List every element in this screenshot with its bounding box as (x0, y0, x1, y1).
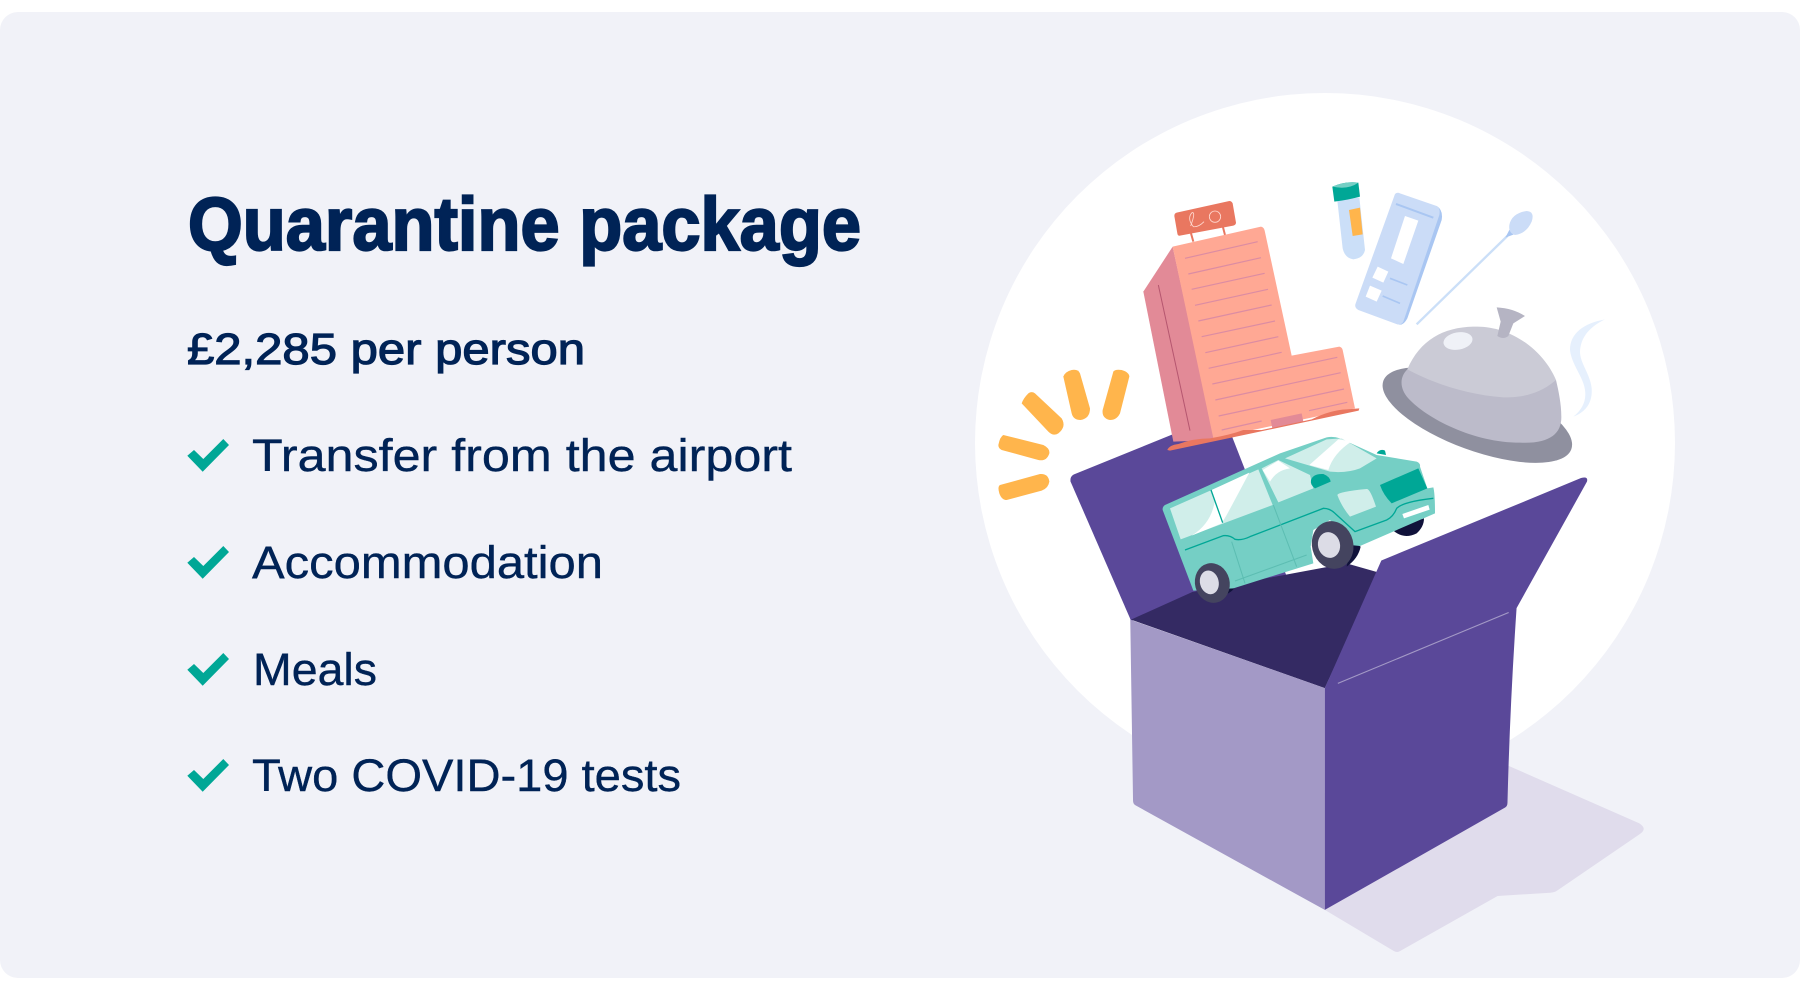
title: Quarantine package (188, 182, 861, 266)
list item: meals: Meals (253, 644, 377, 695)
box front faces (1130, 477, 1587, 910)
price: £2,285 per person (187, 325, 585, 374)
trim lines (1185, 498, 1433, 550)
icon: check (187, 439, 229, 472)
right face and flap (1325, 477, 1587, 910)
body (1163, 437, 1435, 591)
list item: accommodation: Accommodation (252, 537, 603, 588)
headlight panel (1380, 468, 1427, 503)
mirror (1311, 474, 1331, 488)
rear wheel (1191, 559, 1234, 607)
icon: burst marks (998, 370, 1129, 500)
windscreen (1285, 438, 1377, 472)
list item: transfer: Transfer from the airport (252, 430, 793, 481)
icon: swab (1417, 211, 1533, 324)
icon: check (187, 546, 229, 579)
rear window (1170, 469, 1273, 539)
front wheel (1307, 517, 1359, 573)
side window (1337, 489, 1376, 517)
icon: test kit (1355, 193, 1442, 325)
icon: van (1163, 437, 1435, 607)
icon: food cloche (1371, 307, 1583, 483)
icon: check (187, 759, 229, 792)
box back flap and interior (1070, 434, 1378, 688)
box shadow (1325, 766, 1644, 952)
icon: test tube (1332, 182, 1365, 259)
icon: check (187, 653, 229, 686)
white circle backdrop (975, 93, 1675, 793)
icon: steam (1570, 319, 1605, 417)
middle window (1262, 460, 1313, 502)
list item: tests: Two COVID-19 tests (252, 750, 681, 801)
far wheels (1393, 518, 1424, 536)
list item: meals (187, 644, 377, 695)
icon: hotel building (1143, 201, 1359, 451)
left face (1130, 620, 1325, 910)
